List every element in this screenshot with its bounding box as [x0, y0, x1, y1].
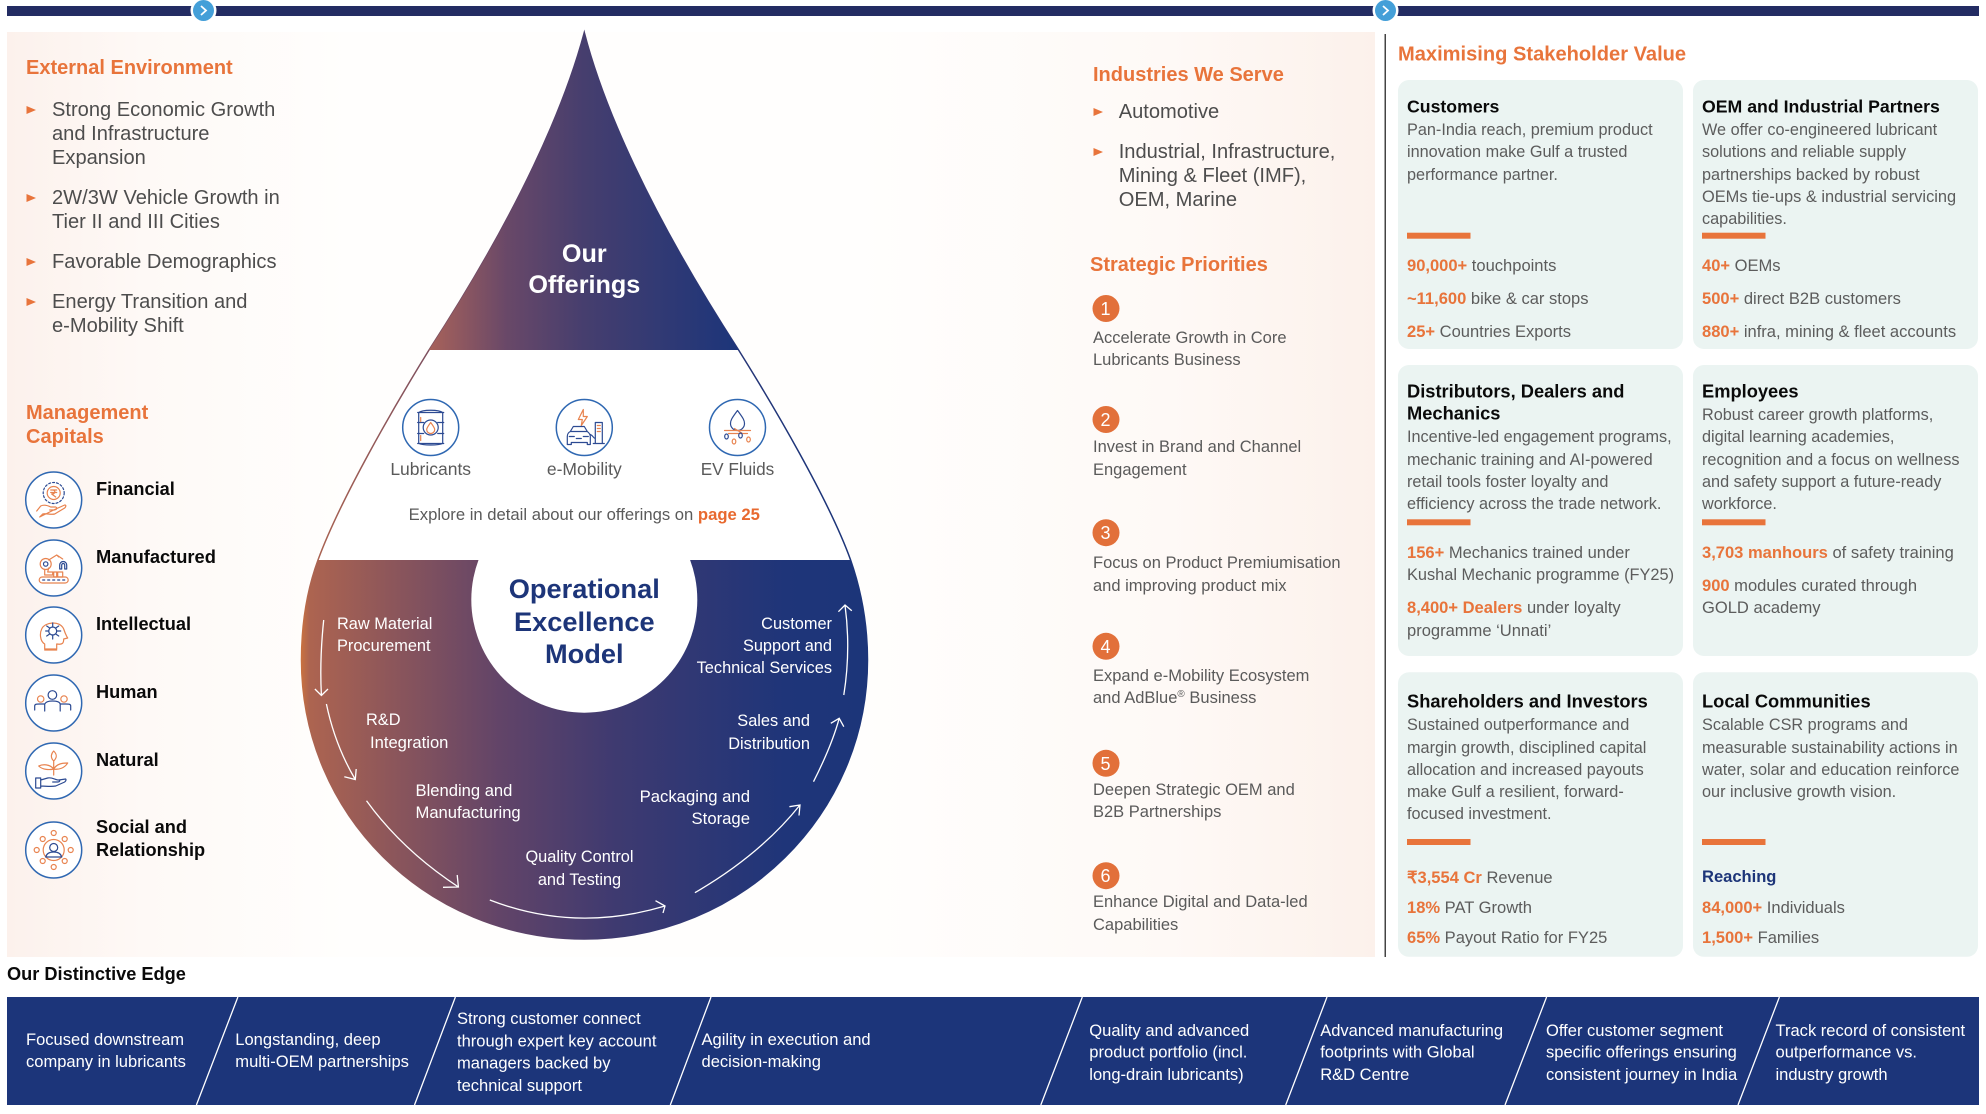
- card: OEM and industrial partners: We offer co-engineered lubricant: [1702, 121, 1938, 139]
- card: customers: 90,000+ touchpoints: [1407, 256, 1556, 275]
- edge 6: footprints with Global: [1320, 1043, 1475, 1062]
- list: external factors: Energy Transition and: [52, 291, 247, 313]
- priority 1: 1: [1100, 299, 1111, 319]
- capital: natural: [26, 743, 159, 799]
- edge 3: through expert key account: [457, 1032, 657, 1051]
- heading: operational excellence model: Excellence: [514, 606, 655, 637]
- capital: intellectual: [26, 607, 191, 663]
- edge 2: Longstanding, deep: [235, 1030, 381, 1049]
- list: external factors: Favorable Demographics: [52, 251, 276, 273]
- priority 4: ®: [1177, 689, 1185, 700]
- card: customers: 25+ Countries Exports: [1407, 322, 1571, 341]
- offering: lubricants: Lubricants: [390, 459, 471, 479]
- priority 4: [1092, 633, 1309, 707]
- heading: strategic priorities: Strategic Priorities: [1090, 254, 1268, 276]
- section: our offerings header: Our: [562, 240, 607, 268]
- panel: strategic priorities: [1090, 254, 1341, 934]
- priority 2: Invest in Brand and Channel: [1093, 438, 1301, 456]
- capital: financial: Financial: [96, 479, 175, 499]
- edge 5: Quality and advanced: [1089, 1021, 1249, 1040]
- edge 6: R&D Centre: [1320, 1065, 1409, 1084]
- capital: social and relationship: [26, 817, 205, 878]
- priority 4: Business: [1185, 689, 1256, 707]
- edge 5: long-drain lubricants): [1089, 1065, 1244, 1084]
- edge 3: managers backed by: [457, 1054, 611, 1073]
- card: customers: Pan-India reach, premium product: [1407, 121, 1653, 139]
- text: offerings page reference: Explore in detail about our offerings on page 25: [409, 505, 760, 524]
- card: distributors, dealers and mechanics: Incentive-led engagement programs,: [1407, 428, 1672, 446]
- panel: external environment: [26, 57, 280, 337]
- card: distributors, dealers and mechanics: Distributors, Dealers and: [1407, 380, 1624, 401]
- card: shareholders and investors: 18% PAT Growth: [1407, 898, 1532, 917]
- edge 4: decision-making: [702, 1052, 821, 1071]
- priority 1: Lubricants Business: [1093, 351, 1241, 369]
- card: shareholders and investors: focused investment.: [1407, 805, 1552, 823]
- card: local communities: Local Communities: [1702, 690, 1871, 711]
- card: distributors, dealers and mechanics: 8,400+ Dealers under loyalty: [1407, 598, 1621, 617]
- capital: social and relationship: Social and: [96, 817, 187, 837]
- edge 7: specific offerings ensuring: [1546, 1043, 1737, 1062]
- edge 6: Advanced manufacturing: [1320, 1021, 1503, 1040]
- card: distributors, dealers and mechanics: efficiency across the trade network.: [1407, 495, 1661, 513]
- card: OEM and industrial partners: solutions and reliable supply: [1702, 143, 1907, 161]
- edge 4: Agility in execution and: [702, 1030, 871, 1049]
- priority 3: 3: [1100, 523, 1111, 543]
- card: OEM and industrial partners: OEMs tie-ups & industrial servicing: [1702, 188, 1956, 206]
- list: industries: Industrial, Infrastructure,: [1119, 141, 1335, 163]
- card: employees: Robust career growth platforms,: [1702, 406, 1933, 424]
- top timeline bar: [7, 0, 1979, 24]
- offering: e-mobility: e-Mobility: [547, 459, 622, 479]
- section: our offerings header: Offerings: [528, 271, 640, 299]
- heading: industries we serve: Industries We Serve: [1093, 64, 1284, 86]
- list: external factors: 2W/3W Vehicle Growth in: [52, 187, 280, 209]
- card: OEM and industrial partners: capabilities.: [1702, 210, 1787, 228]
- capital: natural: Natural: [96, 750, 159, 770]
- list: external factors: [26, 99, 280, 337]
- heading: our distinctive edge: Our Distinctive Edge: [7, 964, 186, 984]
- priority 5: Deepen Strategic OEM and: [1093, 781, 1295, 799]
- card: distributors, dealers and mechanics: mechanic training and AI-powered: [1407, 451, 1653, 469]
- section: our offerings header: [420, 30, 750, 350]
- card: local communities: measurable sustainability actions in: [1702, 739, 1958, 757]
- process labels: [337, 615, 833, 889]
- edge 3: technical support: [457, 1076, 582, 1095]
- edge 1: company in lubricants: [26, 1052, 186, 1071]
- card: employees: GOLD academy: [1702, 598, 1821, 617]
- process labels: Blending and: [416, 781, 512, 800]
- card: distributors, dealers and mechanics: [1398, 365, 1683, 656]
- card: customers: performance partner.: [1407, 166, 1558, 184]
- list: industries: Automotive: [1119, 101, 1219, 123]
- card: shareholders and investors: ₹3,554 Cr Revenue: [1407, 868, 1553, 887]
- priority 1: [1092, 295, 1286, 369]
- card: employees: and safety support a future-ready: [1702, 473, 1942, 491]
- process labels: Raw Material: [337, 615, 432, 633]
- process labels: R&D: [366, 711, 401, 729]
- capital: human: Human: [96, 682, 158, 702]
- card: customers: ~11,600 bike & car stops: [1407, 289, 1589, 308]
- card: distributors, dealers and mechanics: Mechanics: [1407, 402, 1500, 423]
- panel: industries we serve: [1093, 64, 1335, 211]
- card: OEM and industrial partners: 40+ OEMs: [1702, 256, 1781, 275]
- process labels: Technical Services: [697, 659, 832, 677]
- card: employees: [1693, 365, 1978, 656]
- offering: e-mobility: [547, 400, 622, 479]
- priority 4: Expand e-Mobility Ecosystem: [1093, 667, 1309, 685]
- offering: EV fluids: [701, 400, 774, 479]
- card: employees: 900 modules curated through: [1702, 576, 1917, 595]
- priority 1: Accelerate Growth in Core: [1093, 329, 1286, 347]
- process labels: Manufacturing: [416, 803, 521, 822]
- panel: distinctive edge band: [7, 997, 1979, 1105]
- offering: EV fluids: EV Fluids: [701, 459, 774, 479]
- priority 3: and improving product mix: [1093, 577, 1287, 595]
- list: external factors: Strong Economic Growth: [52, 99, 275, 121]
- card: OEM and industrial partners: 500+ direct B2B customers: [1702, 289, 1901, 308]
- card: local communities: Reaching: [1702, 867, 1776, 886]
- icon: chevron marker right: [1372, 0, 1398, 24]
- card: shareholders and investors: Shareholders and Investors: [1407, 690, 1648, 711]
- card: shareholders and investors: Sustained outperformance and: [1407, 716, 1629, 734]
- priority 6: [1092, 862, 1308, 934]
- list: external factors: Expansion: [52, 147, 146, 169]
- card: shareholders and investors: make Gulf a resilient, forward-: [1407, 783, 1624, 801]
- priority 3: [1092, 519, 1341, 595]
- card: customers: innovation make Gulf a trusted: [1407, 143, 1627, 161]
- card: distributors, dealers and mechanics: retail tools foster loyalty and: [1407, 473, 1608, 491]
- card: OEM and industrial partners: 880+ infra, mining & fleet accounts: [1702, 322, 1956, 341]
- card: local communities: 84,000+ Individuals: [1702, 898, 1845, 917]
- list: industries: OEM, Marine: [1119, 189, 1237, 211]
- capital: manufactured: [26, 540, 216, 596]
- process labels: Integration: [370, 733, 448, 752]
- priority 2: 2: [1100, 410, 1111, 430]
- card: employees: 3,703 manhours of safety training: [1702, 543, 1954, 562]
- edge 7: Offer customer segment: [1546, 1021, 1723, 1040]
- process labels: Packaging and: [640, 787, 750, 806]
- card: OEM and industrial partners: partnerships backed by robust: [1702, 166, 1920, 184]
- heading: operational excellence model: [471, 560, 698, 713]
- card: local communities: [1693, 672, 1978, 957]
- list: external factors: Tier II and III Cities: [52, 211, 220, 233]
- capital: social and relationship: Relationship: [96, 840, 205, 860]
- card: OEM and industrial partners: [1693, 80, 1978, 349]
- offering: lubricants: [390, 400, 471, 479]
- icon: chevron marker left: [190, 0, 216, 24]
- process labels: Support and: [743, 637, 832, 655]
- panel: business model background: [7, 32, 1375, 957]
- edge 5: product portfolio (incl.: [1089, 1043, 1247, 1062]
- priority 5: B2B Partnerships: [1093, 803, 1221, 821]
- priority 4: and AdBlue: [1093, 689, 1177, 707]
- priority 5: [1092, 750, 1295, 821]
- section: offerings list: [390, 400, 774, 524]
- panel: management capitals: [26, 402, 216, 878]
- list: external factors: e-Mobility Shift: [52, 315, 184, 337]
- heading: operational excellence model: Model: [545, 638, 624, 669]
- card: customers: [1398, 80, 1683, 349]
- priority 2: [1092, 406, 1301, 479]
- priority 5: 5: [1100, 754, 1111, 774]
- process labels: and Testing: [538, 871, 621, 889]
- edge 3: Strong customer connect: [457, 1009, 641, 1028]
- heading: management capitals: Management: [26, 402, 149, 424]
- list: industries: Mining & Fleet (IMF),: [1119, 165, 1306, 187]
- capital: intellectual: Intellectual: [96, 614, 191, 634]
- list: industries: [1094, 101, 1335, 211]
- heading: external environment: External Environment: [26, 57, 233, 79]
- priority 6: Capabilities: [1093, 916, 1178, 934]
- edge 8: Track record of consistent: [1776, 1021, 1965, 1040]
- chart: oil drop diagram: [295, 30, 875, 945]
- process labels: Customer: [761, 615, 833, 633]
- card: shareholders and investors: 65% Payout Ratio for FY25: [1407, 928, 1607, 947]
- card: local communities: water, solar and education reinforce: [1701, 761, 1959, 779]
- card: local communities: 1,500+ Families: [1702, 928, 1819, 947]
- priority 3: Focus on Product Premiumisation: [1093, 554, 1341, 572]
- priority 4: 4: [1100, 637, 1111, 657]
- process labels: Quality Control: [525, 848, 634, 866]
- edge 2: multi-OEM partnerships: [235, 1052, 409, 1071]
- card: OEM and industrial partners: OEM and Industrial Partners: [1702, 97, 1940, 117]
- process labels: Distribution: [728, 735, 810, 753]
- priority 6: Enhance Digital and Data-led: [1093, 893, 1308, 911]
- card: employees: recognition and a focus on wellness: [1702, 451, 1959, 469]
- heading: maximising stakeholder value: Maximising Stakeholder Value: [1398, 44, 1686, 66]
- arrows: process cycle: [315, 605, 852, 918]
- capital: human: [26, 675, 158, 731]
- card: shareholders and investors: margin growth, disciplined capital: [1407, 739, 1646, 757]
- card: employees: digital learning academies,: [1702, 428, 1894, 446]
- heading: operational excellence model: Operational: [509, 573, 660, 604]
- card: employees: workforce.: [1701, 495, 1777, 513]
- card: shareholders and investors: allocation and increased payouts: [1407, 761, 1644, 779]
- card: distributors, dealers and mechanics: programme ‘Unnati’: [1407, 621, 1551, 640]
- process labels: Procurement: [337, 637, 431, 655]
- edge 8: industry growth: [1776, 1065, 1888, 1084]
- card: employees: Employees: [1702, 380, 1799, 401]
- process labels: Sales and: [737, 712, 810, 730]
- card: distributors, dealers and mechanics: 156+ Mechanics trained under: [1407, 543, 1630, 562]
- card: distributors, dealers and mechanics: Kushal Mechanic programme (FY25): [1407, 566, 1674, 584]
- section: operational excellence model: [302, 560, 867, 938]
- priority 6: 6: [1100, 866, 1111, 886]
- card: customers: Customers: [1407, 97, 1500, 117]
- edge 1: Focused downstream: [26, 1030, 184, 1049]
- edge 7: consistent journey in India: [1546, 1065, 1738, 1084]
- capital: financial: [26, 472, 175, 528]
- card: shareholders and investors: [1398, 672, 1683, 957]
- card: local communities: our inclusive growth vision.: [1702, 783, 1896, 801]
- panel: maximising stakeholder value: [1398, 44, 1978, 957]
- process labels: Storage: [692, 809, 750, 828]
- capital: manufactured: Manufactured: [96, 546, 216, 567]
- heading: management capitals: Capitals: [26, 426, 104, 448]
- list: external factors: and Infrastructure: [52, 123, 209, 145]
- card: local communities: Scalable CSR programs and: [1702, 716, 1908, 734]
- priority 2: Engagement: [1093, 461, 1187, 479]
- edge 8: outperformance vs.: [1776, 1043, 1917, 1062]
